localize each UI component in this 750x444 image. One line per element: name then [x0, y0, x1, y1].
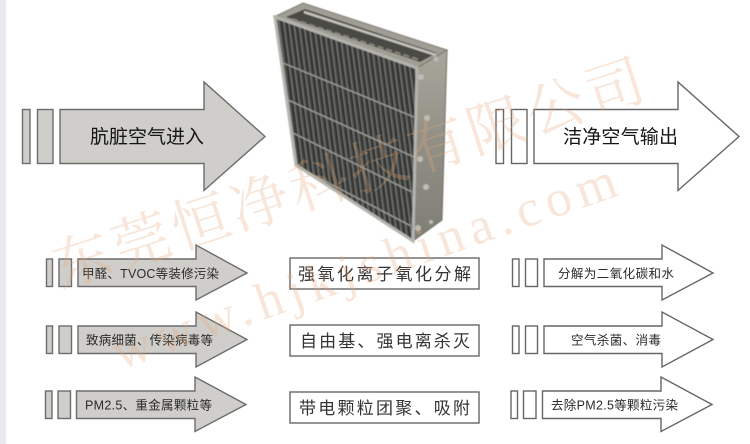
inlet arrow: dirty air in [22, 82, 265, 190]
pollutant arrow: bacteria and viruses [46, 312, 247, 367]
watermark: website: www.hjkjshina.com [105, 152, 624, 381]
pollutant arrow: particulates and heavy metals [46, 377, 246, 432]
product front fins [274, 17, 417, 241]
process box: strong oxidising ions: 强氧化离子氧化分解 [298, 265, 471, 284]
result arrow: particulate removal [511, 377, 712, 432]
left edge strip [0, 0, 6, 444]
result arrow: air sterilisation [512, 312, 713, 367]
product top face [274, 3, 447, 69]
result arrow: air sterilisation: 空气杀菌、消毒 [571, 332, 661, 348]
product frame [275, 17, 417, 241]
pollutant arrow: particulates and heavy metals: PM2.5、重金属颗粒等 [85, 398, 212, 412]
result arrow: particulate removal: 去除PM2.5等颗粒污染 [551, 398, 678, 412]
outlet arrow: clean air out [496, 82, 739, 190]
product support rods [283, 63, 414, 226]
process box: free radicals: 自由基、强电离杀灭 [300, 332, 470, 351]
product side panel with bolts [413, 50, 447, 241]
process box: strong oxidising ions [290, 258, 479, 289]
outlet arrow: clean air out: 洁净空气输出 [563, 126, 678, 148]
process box: charged particle agglomeration [290, 392, 479, 423]
result arrow: decomposed to CO2 and water [512, 245, 713, 300]
process box: charged particle agglomeration: 带电颗粒团聚、吸附 [299, 399, 470, 418]
watermark: company name: 东莞恒净科技有限公司 [45, 48, 653, 301]
process box: free radicals [290, 325, 479, 356]
product: electrostatic purifier module [274, 3, 447, 241]
pollutant arrow: bacteria and viruses: 致病细菌、传染病毒等 [86, 332, 213, 348]
result arrow: decomposed to CO2 and water: 分解为二氧化碳和水 [558, 267, 674, 281]
pollutant arrow: formaldehyde and TVOC [46, 245, 247, 300]
inlet arrow: dirty air in: 肮脏空气进入 [90, 126, 204, 148]
pollutant arrow: formaldehyde and TVOC: 甲醛、TVOC等装修污染 [82, 266, 219, 281]
